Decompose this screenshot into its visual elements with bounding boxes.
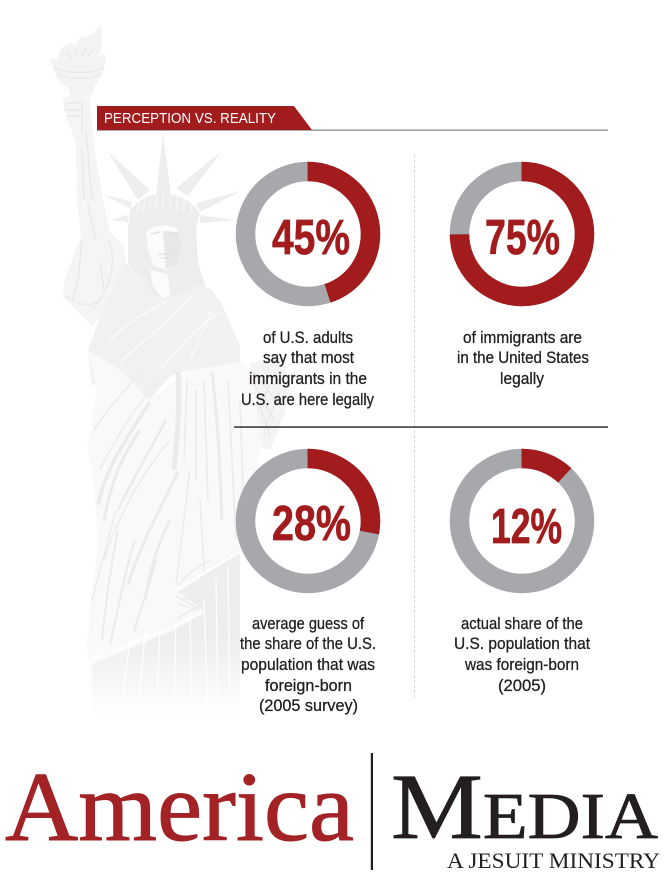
caption 28: average guess of bbox=[252, 614, 364, 633]
caption 12: actual share of the bbox=[461, 614, 583, 633]
header ribbon bbox=[97, 106, 608, 131]
drape fold hatching bbox=[174, 560, 210, 620]
hair and crown bbox=[128, 194, 206, 300]
logo divider bbox=[371, 753, 373, 870]
donut 45 bbox=[246, 172, 370, 296]
upper robe bbox=[88, 262, 240, 400]
lower robe mass under drape bbox=[92, 552, 240, 718]
donut 28 bbox=[246, 458, 370, 584]
panel: 12 percent bbox=[454, 458, 590, 695]
horizontal divider bbox=[234, 426, 608, 428]
heading: PERCEPTION VS. REALITY bbox=[104, 111, 276, 127]
caption 12: was foreign-born bbox=[464, 655, 579, 674]
ribbon shape bbox=[97, 106, 312, 130]
value 75: 75% bbox=[485, 211, 560, 265]
caption 45: say that most bbox=[263, 348, 354, 367]
robe fold lines bbox=[92, 372, 244, 645]
caption 75: in the United States bbox=[457, 348, 589, 367]
caption 45: of U.S. adults bbox=[263, 328, 353, 347]
value 12: 12% bbox=[491, 500, 562, 554]
panel: 75 percent bbox=[457, 172, 589, 388]
caption 28: (2005 survey) bbox=[259, 696, 358, 715]
background illustration: Statue of Liberty bbox=[51, 25, 290, 718]
crown rays bbox=[105, 133, 241, 223]
robe body bbox=[87, 350, 262, 718]
header rule bbox=[97, 130, 608, 131]
raised arm and hand bbox=[62, 95, 126, 326]
wordmark Media: MEDIA bbox=[391, 756, 658, 859]
caption 28: population that was bbox=[241, 655, 375, 674]
caption 12: (2005) bbox=[498, 676, 546, 695]
drape edge bbox=[90, 552, 240, 660]
tagline: A JESUIT MINISTRY bbox=[447, 848, 660, 873]
caption 45 bbox=[241, 328, 374, 409]
logo: America Media bbox=[5, 753, 660, 873]
caption 28: foreign-born bbox=[265, 676, 352, 695]
caption 75 bbox=[457, 328, 589, 388]
book tablet bbox=[250, 356, 290, 450]
donut 75 bbox=[460, 172, 584, 296]
donut 12 bbox=[460, 458, 584, 584]
caption 45: U.S. are here legally bbox=[241, 390, 374, 409]
caption 75: legally bbox=[500, 369, 544, 388]
value 45: 45% bbox=[272, 211, 350, 265]
caption 12: U.S. population that bbox=[454, 634, 590, 653]
caption 28: the share of the U.S. bbox=[240, 634, 376, 653]
lower robe lines bbox=[120, 566, 230, 716]
vertical divider bbox=[414, 155, 416, 698]
caption 12 bbox=[454, 614, 590, 695]
panel: 28 percent bbox=[240, 458, 376, 715]
caption 45: immigrants in the bbox=[249, 369, 367, 388]
value 28: 28% bbox=[272, 497, 351, 551]
wordmark America: America bbox=[5, 753, 354, 862]
neck and chest bbox=[150, 270, 170, 298]
upper robe folds bbox=[110, 296, 222, 370]
torch bbox=[51, 25, 106, 97]
face bbox=[146, 226, 181, 270]
panel: 45 percent bbox=[241, 172, 374, 409]
caption 28 bbox=[240, 614, 376, 715]
caption 75: of immigrants are bbox=[463, 328, 582, 347]
